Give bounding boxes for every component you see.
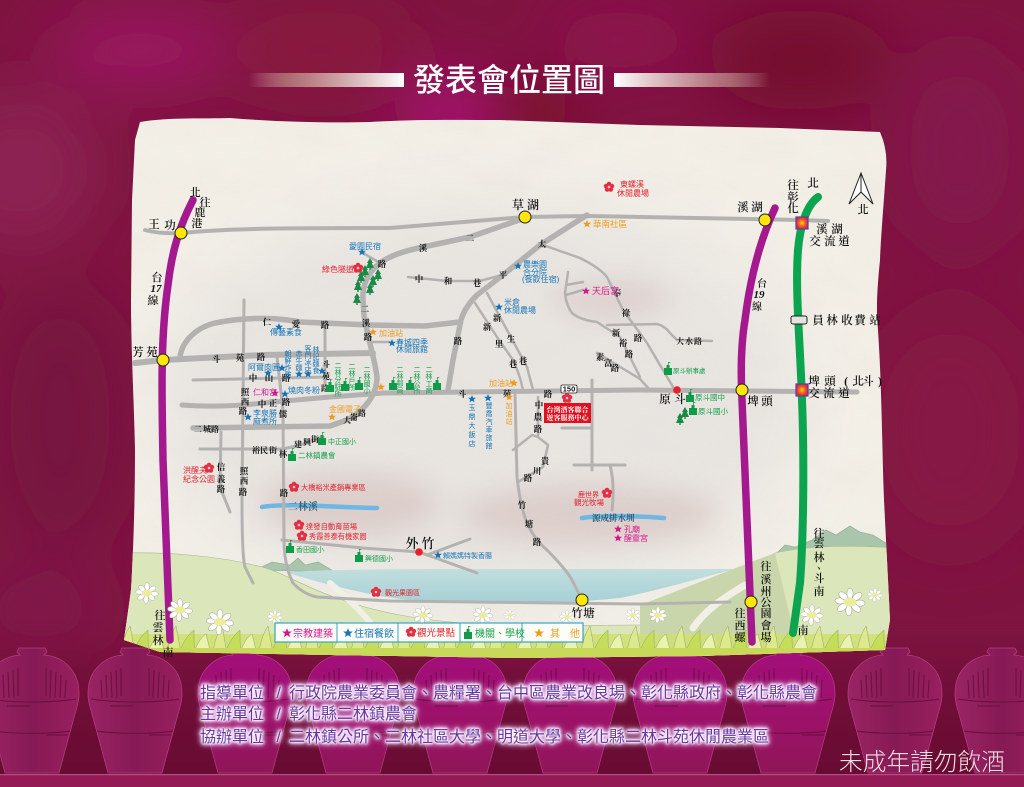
legend: agencies and schools: 機關、學校 xyxy=(475,627,525,640)
title text: 發表會位置圖 xyxy=(413,62,605,98)
road network xyxy=(135,215,857,604)
credits: / xyxy=(272,706,281,723)
agencies and schools: green buildings: 二林工商 xyxy=(426,367,432,395)
road name labels: 中正路 xyxy=(258,397,291,409)
attractions: red flowers: 休閒農場 xyxy=(617,188,649,198)
road name labels: 信義路 xyxy=(217,462,226,494)
credits: / xyxy=(272,685,281,702)
center jars xyxy=(198,648,835,773)
trees xyxy=(353,258,689,425)
panel: paper map xyxy=(118,118,898,660)
red town nodes xyxy=(415,386,681,556)
town and highway labels: 草湖 xyxy=(512,197,539,212)
lodging and food: blue stars: 賴媽媽特製香腸 xyxy=(443,551,492,560)
attractions: red flowers: 紀念公園 xyxy=(183,474,215,484)
others: orange stars: 金國電子 xyxy=(329,404,361,414)
road name labels: 斗苑路 xyxy=(212,352,266,364)
road name labels: 裕民街 xyxy=(252,445,277,455)
river labels xyxy=(288,500,635,523)
town and highway labels: 員林收費站 xyxy=(812,313,881,327)
temples: pink stars xyxy=(253,285,648,543)
lodging and food: blue stars: (餐飲住宿) xyxy=(522,274,560,284)
title xyxy=(248,62,770,98)
attractions: red flowers: 達發自動育苗場 xyxy=(306,522,357,531)
green freeway xyxy=(793,197,818,633)
attractions: red flowers: 大橋裕米產銷專業區 xyxy=(301,483,366,492)
interchanges xyxy=(796,217,808,396)
white path xyxy=(693,585,745,628)
credits: 協辦單位 xyxy=(200,729,264,746)
legend: others xyxy=(534,627,580,640)
town and highway labels: 台線 xyxy=(148,270,164,307)
town and highway labels: 北往鹿港 xyxy=(190,185,210,230)
legend: agencies and schools xyxy=(464,626,525,640)
attractions: red flowers: 東螺溪 xyxy=(620,179,644,189)
hills xyxy=(255,526,886,572)
agencies and schools: green buildings: 原斗國中 xyxy=(695,392,725,402)
credits xyxy=(200,683,817,746)
credits: 二林鎮公所、二林社區大學、明道大學、彰化縣二林斗苑休閒農業區 xyxy=(289,727,769,746)
agencies and schools: green buildings: 二林鎮農會 xyxy=(298,450,336,460)
attractions: red flowers: 觀光果園區 xyxy=(385,588,420,597)
road name labels: 中山路 xyxy=(249,373,291,383)
town and highway labels: 竹塘 xyxy=(571,606,595,620)
town and highway labels: 外竹 xyxy=(405,536,435,551)
road name labels: 儒林路 xyxy=(279,409,289,498)
road name labels: 新新生里巷巷 xyxy=(483,313,528,369)
road name labels: 建興街 xyxy=(294,434,319,449)
town and highway labels: 交流道 xyxy=(808,386,850,400)
lodging and food: blue stars: 林記麵食 xyxy=(312,345,320,375)
north arrow xyxy=(849,173,873,216)
left field xyxy=(124,546,895,660)
town and highway labels: 往溪州公園會場 xyxy=(760,559,772,644)
town and highway labels: 埤頭 xyxy=(747,394,773,408)
lodging and food: blue stars: 燒肉冬粉 xyxy=(288,385,320,395)
attractions: red flowers: 綠色隧道 xyxy=(322,264,354,274)
legend: others: 其 他 xyxy=(550,627,580,640)
agencies and schools: green buildings xyxy=(286,362,728,563)
lodging and food: blue stars: 春城四季 xyxy=(396,337,428,347)
road name labels: 太平路 xyxy=(454,239,547,346)
road name labels: 照西路 xyxy=(239,466,249,497)
town and highway labels: 王功 xyxy=(148,218,176,232)
others: orange stars: 加油站 xyxy=(379,328,403,338)
credits: 指導單位 xyxy=(200,685,264,702)
purple provincial highway 17 xyxy=(162,200,193,640)
credits: / xyxy=(272,729,281,746)
rivers xyxy=(262,505,664,518)
road name labels: 大水路 xyxy=(676,336,702,346)
title bar right xyxy=(614,73,770,87)
road name labels: 二溪路路 xyxy=(361,259,387,342)
road name labels: 照西路 xyxy=(239,387,250,416)
others: orange stars: 華南社區 xyxy=(593,219,628,229)
road name labels xyxy=(194,233,702,547)
credits: 行政院農業委員會、農糧署、台中區農業改良場、彰化縣政府、彰化縣農會 xyxy=(289,683,817,702)
north arrow: 北 xyxy=(858,202,868,216)
lodging and food: blue stars: 朝鮮炸雞 xyxy=(284,350,292,379)
toll station xyxy=(791,316,807,324)
legend: lodging and food xyxy=(343,627,394,640)
lake xyxy=(285,569,735,604)
lodging and food: blue stars: 李泉勝 xyxy=(253,408,277,418)
lodging and food: blue stars: 豐喬汽車旅館 xyxy=(486,401,492,450)
credits: 主辦單位 xyxy=(200,706,264,723)
road name labels: 斗苑路 xyxy=(458,389,553,399)
temples: pink stars: 醒靈宮 xyxy=(624,533,648,543)
road name labels: 貴川路 xyxy=(524,456,551,483)
road name labels: 中和巷 xyxy=(415,274,482,288)
purple provincial highway 19 xyxy=(741,208,775,642)
others: orange stars: 加油站 xyxy=(506,401,512,426)
attractions: red flowers xyxy=(183,179,649,597)
attractions: red flowers: 洪醒夫 xyxy=(183,465,207,475)
legend: attractions xyxy=(406,627,456,639)
road name labels: 二城路 xyxy=(194,424,219,434)
lodging and food: blue stars: 玉鼎大飯店 xyxy=(468,404,476,448)
lodging and food: blue stars: 赤牛麵 xyxy=(296,350,302,372)
town and highway labels: 往彰化北 xyxy=(787,176,819,215)
road name labels: 斗苑路 xyxy=(321,359,330,393)
lodging and food: blue stars: 米倉 xyxy=(504,297,520,307)
attractions: red flowers: 秀霞善泰有機家園 xyxy=(309,532,367,541)
grass band xyxy=(118,634,898,660)
lodging and food: blue stars: 客門冰店 xyxy=(304,344,312,374)
town and highway labels: 芳苑 xyxy=(132,345,158,359)
temples: pink stars: 仁和宮 xyxy=(253,387,277,397)
road name labels: 新裕路 xyxy=(612,328,634,359)
paper sheet xyxy=(124,118,890,660)
town and highway labels xyxy=(132,176,882,659)
red service center box: 遊客服務中心 xyxy=(546,413,589,422)
town and highway labels: 19 xyxy=(754,289,765,301)
road name labels: 竹塘路 xyxy=(518,500,542,547)
title bar left xyxy=(248,73,404,87)
lodging and food: blue stars: 麻煮所 xyxy=(253,416,277,426)
town and highway labels: 南 xyxy=(798,623,808,637)
agencies and schools: green buildings: 原斗國小 xyxy=(698,407,728,416)
temples: pink stars: 孔廟 xyxy=(624,524,640,534)
agencies and schools: green buildings: 香田國小 xyxy=(296,545,324,554)
lodging and food: blue stars: 休閒農場 xyxy=(504,305,536,315)
town and highway labels: 埤頭(北斗) xyxy=(808,374,882,388)
road name labels: 中農路 xyxy=(534,400,544,434)
agencies and schools: green buildings: 二林戶所 xyxy=(348,364,356,392)
wine jars row xyxy=(0,620,1024,787)
daisies xyxy=(136,583,882,635)
agencies and schools: green buildings: 二林國小 xyxy=(364,367,370,395)
landscape: fields, hills and lake xyxy=(118,526,898,660)
attractions: red flowers: 觀光牧場 xyxy=(574,497,604,507)
temples: pink stars: 天后宮 xyxy=(592,285,619,296)
agencies and schools: green buildings: 二林公所 xyxy=(414,367,420,395)
lodging and food: blue stars: 愛園民宿 xyxy=(349,241,381,251)
river labels: 二林溪 xyxy=(288,500,318,513)
town and highway labels: 原斗 xyxy=(659,392,686,406)
town and highway labels: 17 xyxy=(150,283,162,295)
credits: 彰化縣二林鎮農會 xyxy=(289,704,417,723)
town and highway labels: 溪湖 xyxy=(737,200,763,214)
road name labels: 大崙路 xyxy=(343,408,366,425)
agencies and schools: green buildings: 二林郵局 xyxy=(396,367,404,395)
legend: lodging and food: 住宿餐飲 xyxy=(354,627,394,640)
attractions: red flowers: 鹿世界 xyxy=(578,490,599,499)
agencies and schools: green buildings: 二林分駐所 xyxy=(334,363,342,398)
lodging and food: blue stars: 阿爾肉圓 xyxy=(248,362,280,372)
agencies and schools: green buildings: 原斗辦事處 xyxy=(673,366,706,375)
route 150 sign: 150 xyxy=(563,385,575,394)
town and highway labels: 往雲林南 xyxy=(152,608,174,659)
shelf xyxy=(0,774,1024,787)
road name labels: 仁愛路 xyxy=(263,317,330,330)
road name labels: 溪二 xyxy=(419,233,475,253)
road name labels: 奉祿路 xyxy=(613,288,643,343)
legend: religious sites xyxy=(282,627,333,640)
town and highway labels: 溪湖交流道 xyxy=(809,222,850,248)
right darker field xyxy=(640,553,800,660)
outer jars xyxy=(0,648,1024,773)
town and highway labels: 往雲林、斗南 xyxy=(814,526,824,598)
town and highway labels: 台線 xyxy=(752,277,768,313)
red service center box xyxy=(544,403,591,423)
yellow town nodes xyxy=(157,211,771,608)
agencies and schools: green buildings: 中正國小 xyxy=(328,437,356,446)
road name labels: 素富路 xyxy=(596,352,620,373)
legend xyxy=(275,623,583,642)
red service center box: 台灣酒客聯合 xyxy=(546,405,588,414)
legend: religious sites: 宗教建築 xyxy=(293,627,333,640)
agencies and schools: green buildings: 興德國小 xyxy=(365,554,393,563)
others: orange stars: 加油站 xyxy=(489,378,513,388)
lodging and food: blue stars: 休閒旅館 xyxy=(396,344,428,354)
lodging and food: blue stars: 傳藝素食 xyxy=(270,327,302,337)
lodging and food: blue stars xyxy=(244,241,560,560)
warning text: 未成年請勿飲酒 xyxy=(839,749,1005,776)
others: orange stars xyxy=(328,219,628,426)
legend: attractions: 觀光景點 xyxy=(417,627,456,639)
lodging and food: blue stars: 合分院 xyxy=(523,267,547,277)
river labels: 源成排水圳 xyxy=(592,513,635,523)
lodging and food: blue stars: 農樂園 xyxy=(523,259,547,269)
town and highway labels: 往西螺 xyxy=(734,606,746,644)
